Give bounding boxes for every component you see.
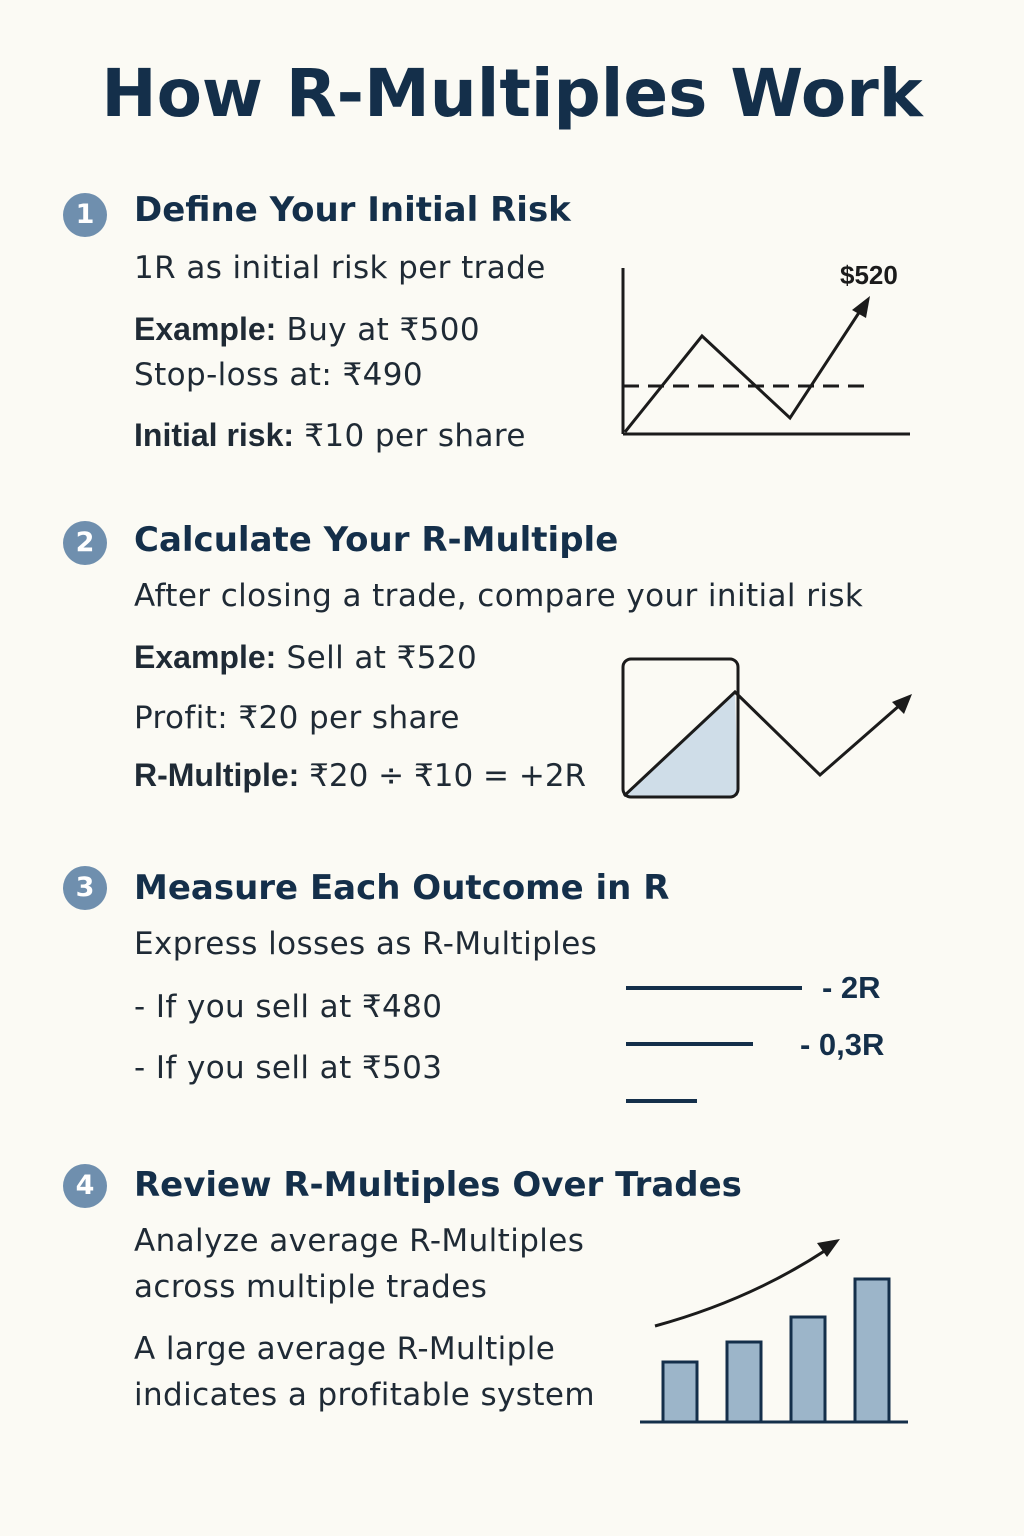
- heading 1: Define Your Initial Risk: [134, 190, 571, 230]
- text block 4: Analyze average R-Multiples: [134, 1223, 584, 1259]
- chart: loss lines: [626, 970, 884, 1103]
- icon: number 3: 3: [76, 872, 94, 903]
- text block 4: indicates a profitable system: [134, 1377, 595, 1413]
- chart: loss lines: - 0,3R: [800, 1027, 884, 1062]
- text block 2: Profit: ₹20 per share: [134, 700, 460, 736]
- panel: step 2: [63, 520, 912, 798]
- text block 1: Example: Buy at ₹500: [134, 311, 480, 348]
- icon: number 1: [63, 193, 107, 237]
- text block 4: A large average R-Multiple: [134, 1331, 555, 1367]
- text block 1: [134, 250, 546, 454]
- text block 4: [134, 1223, 595, 1413]
- text block 3: [134, 926, 597, 1086]
- text block 1: Stop-loss at: ₹490: [134, 357, 423, 393]
- title: How R-Multiples Work: [101, 55, 923, 132]
- panel: step 1: [63, 190, 910, 454]
- icon: number 4: 4: [76, 1170, 94, 1201]
- chart: R box: [622, 658, 912, 798]
- text block 1: 1R as initial risk per trade: [134, 250, 546, 286]
- text block 3: Express losses as R-Multiples: [134, 926, 597, 962]
- icon: number 4: [63, 1164, 107, 1208]
- heading 4: Review R-Multiples Over Trades: [134, 1165, 742, 1205]
- panel: step 4: [63, 1164, 908, 1424]
- text block 3: - If you sell at ₹503: [134, 1050, 442, 1086]
- text block 2: Example: Sell at ₹520: [134, 639, 477, 676]
- text block 4: across multiple trades: [134, 1269, 487, 1305]
- icon: number 3: [63, 866, 107, 910]
- text block 3: - If you sell at ₹480: [134, 989, 442, 1025]
- text block 2: R-Multiple: ₹20 ÷ ₹10 = +2R: [134, 757, 586, 794]
- text block 2: After closing a trade, compare your initial risk: [134, 578, 863, 614]
- heading 2: Calculate Your R-Multiple: [134, 520, 618, 560]
- icon: number 1: 1: [76, 199, 94, 230]
- icon: number 2: 2: [76, 527, 94, 558]
- chart: bar chart: [640, 1239, 908, 1424]
- text block 2: [134, 578, 863, 794]
- heading 3: Measure Each Outcome in R: [134, 868, 669, 908]
- panel: step 3: [63, 866, 884, 1103]
- icon: number 2: [63, 521, 107, 565]
- chart: price line: [622, 260, 910, 436]
- chart: price line: $520: [840, 260, 898, 290]
- text block 1: Initial risk: ₹10 per share: [134, 417, 526, 454]
- chart: loss lines: - 2R: [822, 970, 881, 1005]
